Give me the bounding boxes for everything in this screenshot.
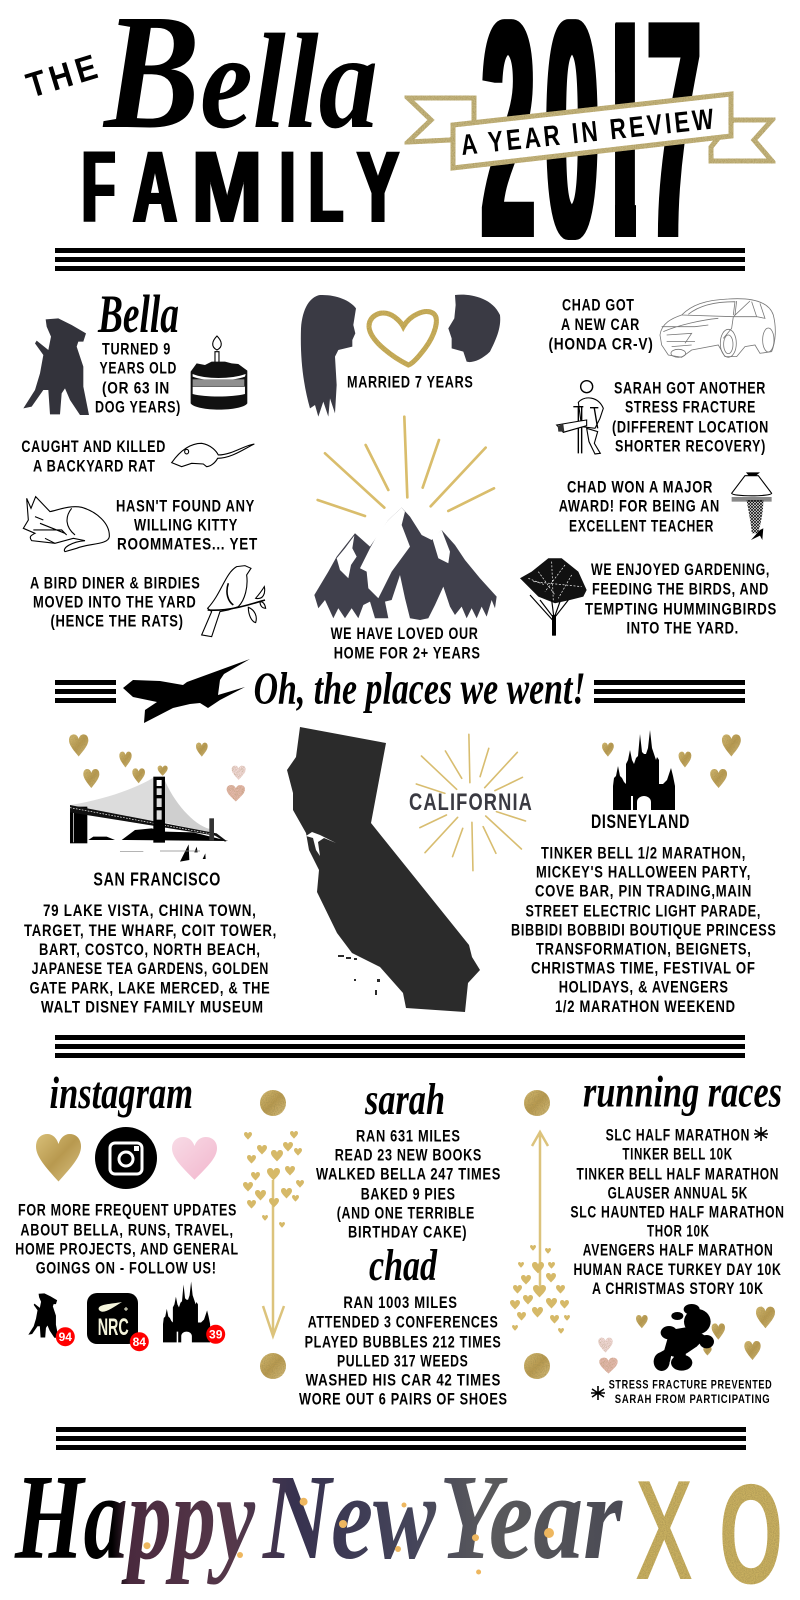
gold dot top [524,1090,550,1116]
text: stress fracture: STRESS FRACTURE [625,399,756,417]
panel: home in the mountains [314,417,497,662]
greeting words [14,1450,623,1585]
icon: small dog with 94 badge [28,1293,75,1346]
text: chad got a new car: CHAD GOT [562,296,635,314]
title word: Family: M [192,130,262,244]
text: Sarah list: BIRTHDAY CAKE) [348,1223,467,1241]
stripes right [594,680,745,703]
text: gardening: INTO THE YARD. [626,619,739,637]
text: married 7 years: MARRIED 7 YEARS [347,373,474,391]
bokeh lights [144,1498,554,1574]
text: caught and killed: A BACKYARD RAT [33,457,156,475]
item: new car [548,296,775,357]
icon: Golden Gate Bridge [70,777,228,862]
heading: chad: chad [369,1241,438,1290]
text: gardening [585,561,777,637]
icon: couple silhouettes with heart [301,295,500,417]
icon: leg lamp [732,472,772,540]
text: follow us: GOINGS ON - FOLLOW US! [36,1259,217,1277]
divider stripes: top [55,248,745,271]
title word: Family [82,130,399,244]
footnote: stress fracture [591,1378,772,1406]
icon: small dog with 94 badge: 94 [59,1330,72,1344]
banner: A Year in Review [408,94,772,168]
text: follow us: HOME PROJECTS, AND GENERAL [15,1240,239,1258]
greeting words: Year [439,1450,623,1585]
text: major award: CHAD WON A MAJOR [567,478,713,496]
panel: Bella the dog [23,284,247,417]
item: kitty roommates [23,497,258,553]
text: Chad list: PLAYED BUBBLES 212 TIMES [305,1333,502,1351]
label: Disneyland: DISNEYLAND [591,812,690,833]
text: kitty: ROOMMATES... YET [117,535,258,553]
section heading: the places we went [55,659,745,723]
text: turned 9: YEARS OLD [100,360,177,378]
heading: instagram: instagram [50,1067,193,1118]
icon: Nike Run Club with 84 badge: 84 [133,1335,146,1349]
divider stripes: bottom [56,1427,746,1450]
text: turned 9: (OR 63 IN [102,379,170,397]
title word: The: THE [22,46,106,106]
icon: man silhouette [448,295,500,362]
text: turned 9 [95,341,181,417]
text: bird diner: (HENCE THE RATS) [50,612,184,630]
year: 2017 [482,19,700,240]
greeting words: New [261,1450,436,1585]
icon: airplane [123,659,250,723]
title word: Family: F [82,130,115,244]
gold rays above mountain [318,417,494,516]
icon: cat [23,497,109,552]
divider stripes: middle [55,1035,745,1058]
text: major award [559,478,720,535]
heading: sarah: sarah [364,1075,445,1124]
label: California: CALIFORNIA [409,789,533,816]
text: Chad list: PULLED 317 WEEDS [337,1352,468,1370]
icon: small castle with 39 badge: 39 [209,1328,223,1342]
text: races list [570,1126,785,1298]
icon: dog silhouette [23,318,89,415]
title word: Family: A [133,130,177,244]
icon: mountains and pines [314,508,497,620]
icon: Mickey Mouse running [654,1304,714,1371]
text: San Francisco list: BART, COSTCO, NORTH BEACH, [39,941,261,959]
banner text: A YEAR IN REVIEW [459,103,718,162]
icon: Nike Run Club with 84 badge [87,1293,149,1351]
text: follow us: FOR MORE FREQUENT UPDATES [18,1201,237,1219]
map silhouette [287,727,480,1012]
icon: woman silhouette [301,295,356,417]
text: loved our home: WE HAVE LOVED OUR [331,625,479,643]
text: Disneyland list: TINKER BELL 1/2 MARATHON, [541,844,746,862]
label: San Francisco: SAN FRANCISCO [93,870,221,890]
text: Sarah list: RAN 631 MILES [356,1127,461,1145]
text: races list: GLAUSER ANNUAL 5K [608,1184,748,1202]
heart cluster [243,1131,304,1228]
icon: Nike Run Club with 84 badge: NRC [98,1314,129,1341]
icon: rat [172,443,254,467]
heading text: Oh, the places we went! [254,662,586,713]
panel: Chad stats [299,1241,508,1408]
icon: tree [520,558,587,636]
text: follow us [15,1201,239,1277]
banner centre band [453,94,731,168]
banner left tail [408,98,474,142]
text: Sarah list: WALKED BELLA 247 TIMES [316,1165,501,1183]
item: stress fracture [557,379,769,455]
text: major award: AWARD! FOR BEING AN [559,498,720,516]
text: Disneyland list [511,844,776,1016]
text: Sarah list: (AND ONE TERRIBLE [337,1204,475,1222]
text: caught and killed: CAUGHT AND KILLED [21,438,166,456]
text: kitty [116,497,258,553]
text: major award: EXCELLENT TEACHER [569,517,714,535]
text: Disneyland list: 1/2 MARATHON WEEKEND [555,998,736,1016]
text: stress fracture [612,379,769,455]
item: major award [559,472,772,540]
text: San Francisco list: JAPANESE TEA GARDENS, GOLDEN [32,960,269,978]
icon: car outline [660,299,775,357]
text: Sarah list: BAKED 9 PIES [361,1185,456,1203]
panel: San Francisco [24,734,277,1016]
text: Disneyland list: HOLIDAYS, & AVENGERS [559,978,729,996]
gold hearts [602,734,741,788]
text: Sarah list [316,1127,501,1241]
text: turned 9: DOG YEARS) [95,399,181,417]
text: bird diner: A BIRD DINER & BIRDIES [30,574,200,592]
stripes left [55,680,116,703]
footer: gold X O [637,1454,783,1600]
panel: Sarah stats [316,1075,501,1241]
footer: Happy New Year [14,1450,623,1585]
icon: person on crutches [557,381,603,454]
item: bird diner [30,566,266,637]
icon: asterisk by SLC half marathon [754,1127,768,1141]
text: races list: TINKER BELL 10K [622,1145,733,1163]
greeting words: Happy [14,1450,256,1585]
icon: Disney castle [613,730,675,810]
hearts near Mickey [598,1307,775,1373]
text: races list: SLC HALF MARATHON [606,1126,750,1144]
icon: gold heart outline [369,312,436,365]
text: bird diner: MOVED INTO THE YARD [33,593,196,611]
title word: Family: L [309,130,343,244]
gold and pink hearts [69,734,246,801]
text: Chad list: ATTENDED 3 CONFERENCES [308,1313,498,1331]
banner right tail [711,120,772,161]
text: San Francisco list: TARGET, THE WHARF, COIT TOWER, [24,922,277,940]
icon: birthday cake [191,336,247,410]
text: Chad list [299,1294,508,1408]
text: San Francisco list: GATE PARK, LAKE MERCED, & THE [30,979,270,997]
text: Chad list: WASHED HIS CAR 42 TIMES [306,1371,501,1389]
text: San Francisco list [24,902,277,1016]
San Francisco Bay notch [306,832,336,856]
panel: married couple [301,295,500,417]
text: kitty: HASN'T FOUND ANY [116,497,255,515]
panel: Disneyland [511,730,776,1016]
gold dot bottom [524,1353,550,1379]
title word: Family: I [280,130,295,244]
text: caught and killed [21,438,166,475]
item: gardening [520,558,777,637]
panel: running races [570,1068,785,1406]
arrow shaft and head [263,1180,284,1336]
icon: instagram logo [95,1127,157,1189]
decoration: left gold arrow with dots [243,1090,304,1379]
text: chad got a new car: (HONDA CR-V) [548,335,654,353]
heart cluster [510,1245,570,1334]
icon: gold heart [36,1134,81,1182]
map: California [287,727,533,1012]
text: turned 9: TURNED 9 [102,341,171,359]
title word: Family: Y [357,130,399,244]
text: chad got a new car [548,296,654,353]
text: bird diner [30,574,200,630]
text: races list: THOR 10K [647,1222,710,1240]
arrow shaft and head [532,1132,548,1290]
decoration: right gold arrow with dots [510,1090,570,1379]
panel: instagram [15,1067,239,1351]
text: chad got a new car: A NEW CAR [561,316,640,334]
title: The Bella Family [22,0,399,244]
text: Chad list: WORE OUT 6 PAIRS OF SHOES [299,1390,508,1408]
icon: pink heart [172,1137,217,1180]
text: San Francisco list: WALT DISNEY FAMILY MUSEUM [41,998,264,1016]
text: loved our home: HOME FOR 2+ YEARS [334,644,481,662]
Channel Islands [338,955,380,995]
heading: Bella: Bella [97,284,179,344]
icon: small castle with 39 badge [163,1282,225,1344]
text: San Francisco list: 79 LAKE VISTA, CHINA TOWN, [43,902,257,920]
item: caught a rat [21,438,254,475]
gold sunburst [416,734,526,871]
icon: bird on branch [202,566,266,637]
gold dot bottom [260,1353,286,1379]
text: kitty: WILLING KITTY [134,516,238,534]
text: loved our home [331,625,481,662]
text: follow us: ABOUT BELLA, RUNS, TRAVEL, [20,1221,234,1239]
text: Sarah list: READ 23 NEW BOOKS [335,1146,482,1164]
gold dot top [260,1090,286,1116]
text: Chad list: RAN 1003 MILES [343,1294,458,1312]
